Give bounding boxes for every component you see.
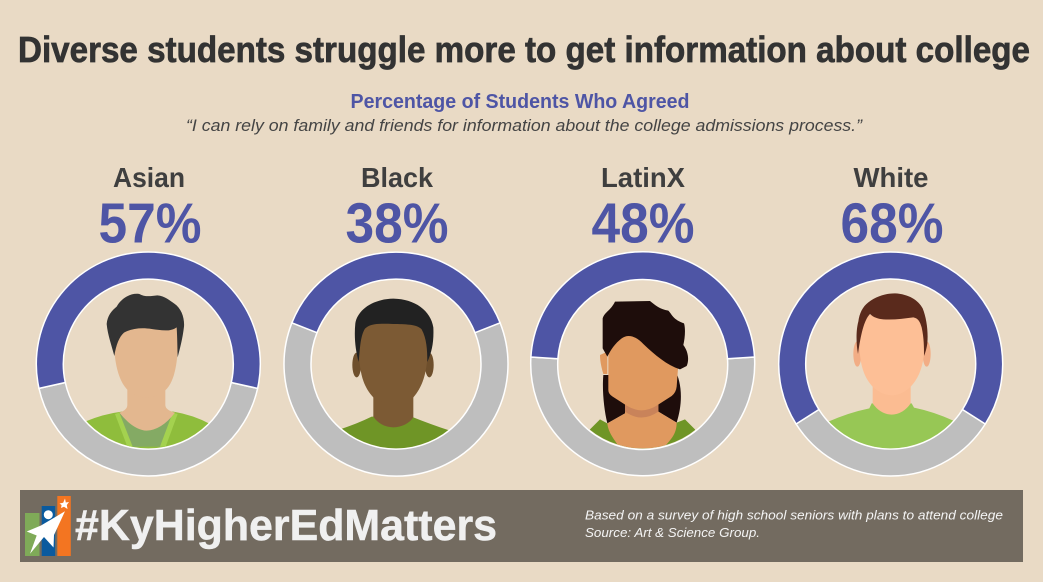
- quote: “I can rely on family and friends for information about the college admissions process.”: [186, 116, 863, 135]
- label: Asian: Asian: [113, 162, 185, 193]
- panel: Black: [284, 162, 508, 476]
- label: Black: Black: [361, 162, 433, 193]
- source note: Source: Art & Science Group.: [585, 525, 760, 540]
- value: 48%: 48%: [592, 192, 694, 256]
- donut: 38%: [284, 252, 508, 476]
- icon: Black student: [340, 299, 450, 453]
- value: 38%: 38%: [346, 192, 448, 256]
- panel: White: [779, 162, 1003, 476]
- donut: 68%: [779, 252, 1003, 476]
- label: White: White: [854, 162, 928, 193]
- source note: Based on a survey of high school seniors with plans to attend college: [585, 508, 1003, 522]
- donut: 57%: [36, 252, 260, 476]
- icon: logo: [25, 496, 71, 556]
- panel: LatinX: [531, 162, 755, 476]
- icon: LatinX student: [590, 301, 695, 453]
- icon: Asian student: [85, 294, 210, 453]
- hashtag: #KyHigherEdMatters: [75, 501, 497, 550]
- panel: Asian: [36, 162, 260, 476]
- subtitle: Percentage of Students Who Agreed: [350, 91, 690, 113]
- value: 57%: 57%: [98, 192, 202, 256]
- icon: White student: [828, 293, 953, 453]
- source note: [585, 508, 1003, 540]
- label: LatinX: LatinX: [601, 162, 685, 193]
- value: 68%: 68%: [840, 192, 944, 256]
- donut: 48%: [531, 252, 755, 476]
- footer banner: [20, 490, 1023, 562]
